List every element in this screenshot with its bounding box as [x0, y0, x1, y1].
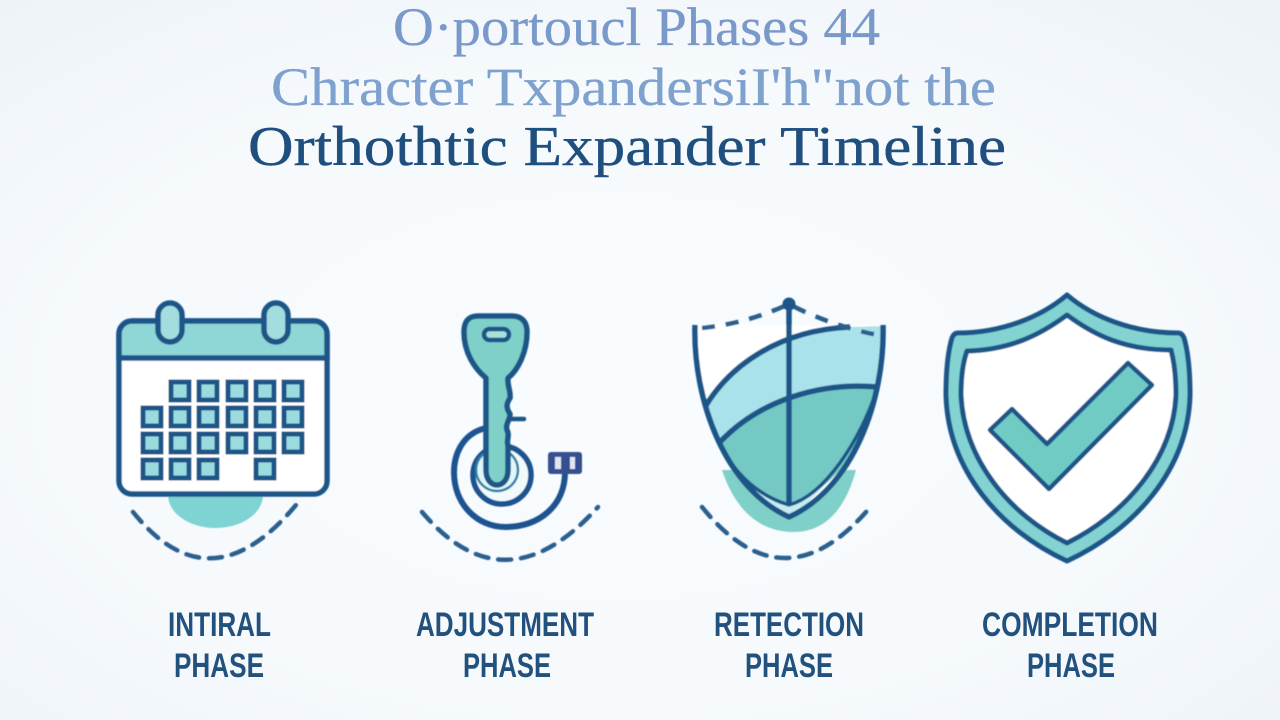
label: completion phase: PHASE [1027, 647, 1115, 685]
label: retection phase: PHASE [745, 647, 833, 685]
key body [464, 316, 527, 485]
label: adjustment phase: ADJUSTMENT [416, 606, 594, 644]
key spur [510, 417, 524, 421]
label: initial phase [168, 606, 271, 685]
label: retection phase: RETECTION [714, 606, 864, 644]
inner shield [961, 315, 1176, 543]
light band [705, 326, 882, 442]
calendar rings [158, 303, 288, 342]
teal blob [722, 470, 856, 532]
title line 2: Chracter TxpandersiI'h"not the [271, 57, 996, 117]
dashed top edge [702, 304, 878, 335]
label: completion phase: COMPLETION [982, 606, 1158, 644]
icon: key [422, 316, 598, 560]
label: adjustment phase: PHASE [463, 647, 551, 685]
teal semicircle [168, 495, 263, 528]
calendar body [119, 321, 327, 494]
title line 3: Orthothtic Expander Timeline [248, 116, 1006, 178]
spiral cable [454, 428, 565, 527]
dashed arc [133, 505, 296, 558]
shield white base [695, 325, 883, 517]
icon: shield with arcs [695, 298, 883, 558]
label: completion phase [982, 606, 1158, 685]
top dot [782, 298, 796, 310]
shield outlines [695, 304, 883, 517]
label: adjustment phase [416, 606, 594, 685]
label: initial phase: INTIRAL [168, 606, 271, 644]
icon: calendar [119, 303, 327, 558]
checkmark [990, 363, 1152, 489]
inner edge band [720, 392, 876, 517]
inner ring [473, 446, 531, 504]
calendar header [119, 321, 327, 358]
icon: shield with check [946, 295, 1190, 561]
dashed arc [422, 507, 598, 560]
key slot [484, 329, 509, 340]
dashed arc [702, 505, 872, 558]
label: initial phase: PHASE [174, 647, 264, 685]
calendar day cells [143, 382, 302, 478]
title [248, 0, 1006, 178]
label: retection phase [714, 606, 864, 685]
teal lower region [720, 386, 878, 505]
connector [548, 452, 582, 474]
outer shield [946, 295, 1190, 561]
